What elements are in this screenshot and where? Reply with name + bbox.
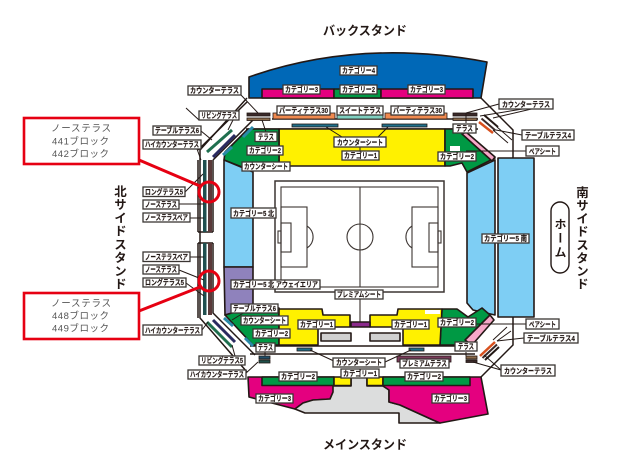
category 4 upper tier	[249, 53, 487, 98]
label: リビングテラス5: リビングテラス5	[201, 355, 243, 365]
label: カウンターテラス NE: カウンターテラス	[502, 99, 550, 109]
main stand seating	[248, 377, 488, 423]
label: カテゴリー1 lower left: カテゴリー1	[300, 319, 333, 329]
label: テラス NE: テラス	[456, 124, 473, 133]
label: カウンターシート main: カウンターシート	[336, 357, 382, 367]
label: ハイカウンターテラス main	[188, 369, 246, 379]
heading: south side stand: 南サイドスタンド	[574, 186, 588, 290]
main yellow right	[367, 377, 383, 386]
label: パーティテラス30 right: パーティテラス30	[393, 106, 442, 115]
label: ペアシート NE	[526, 146, 559, 156]
label: ノーステラス lower: ノーステラス	[145, 265, 177, 274]
label: カテゴリー5 南: カテゴリー5 南	[484, 233, 527, 243]
label: ハイカウンターテラス north	[143, 139, 201, 149]
bottom terrace bars	[259, 348, 477, 363]
home pill	[551, 202, 569, 273]
label: スイートテラス: スイートテラス	[339, 106, 381, 115]
label: テーブルテラス4 NE: テーブルテラス4	[525, 130, 572, 140]
label: カウンターシート NW: カウンターシート	[244, 161, 288, 171]
label: テーブルテラス4 SE: テーブルテラス4	[527, 333, 576, 343]
label: ペアシート SE: ペアシート	[529, 320, 556, 329]
label: カウンターシート back: カウンターシート	[337, 137, 383, 147]
callout: north terrace 448 449	[24, 293, 139, 339]
diagonal terraces	[207, 115, 512, 360]
label: カウンターシート NW	[242, 161, 290, 171]
lower pink strip	[465, 315, 494, 345]
label: ノーステラスペア lower: ノーステラスペア	[145, 252, 188, 262]
label: テーブルテラス6 lower: テーブルテラス6	[233, 303, 276, 313]
back category 3 left	[262, 89, 334, 98]
label: リビングテラス: リビングテラス	[201, 110, 237, 120]
label: カテゴリー1 lower right: カテゴリー1	[394, 319, 427, 329]
label: カテゴリー2 main left: カテゴリー2	[281, 371, 315, 381]
label: リビングテラス	[199, 110, 239, 120]
category 5 south outer blue	[498, 158, 534, 317]
label: ロングテラス5 upper: ロングテラス5	[145, 186, 183, 196]
heading: back stand: バックスタンド	[323, 24, 407, 38]
main gray block	[295, 377, 440, 423]
main green left	[262, 377, 334, 386]
label: カテゴリー2 NW: カテゴリー2	[249, 145, 281, 155]
label: テラス SE: テラス	[458, 342, 474, 351]
main magenta right	[383, 377, 488, 423]
heading: north side stand: 北サイドスタンド	[112, 185, 126, 290]
lower yellow left	[279, 309, 350, 345]
label: カテゴリー2 main right: カテゴリー2	[407, 371, 441, 381]
label: カウンターシート SW: カウンターシート	[243, 315, 286, 325]
leader lines	[179, 95, 553, 374]
north terrace strips	[203, 160, 212, 315]
label: プレミアムテラス: プレミアムテラス	[402, 359, 447, 368]
label: カテゴリー2 back: カテゴリー2	[342, 84, 375, 94]
red highlight circle lower	[199, 271, 219, 291]
red leader upper	[139, 160, 200, 186]
label: カテゴリー2 NE: カテゴリー2	[440, 151, 474, 161]
callout: north terrace 448 449: ノーステラス	[51, 298, 111, 310]
heading: main stand: メインスタンド	[323, 438, 407, 452]
label: ノーステラス upper: ノーステラス	[145, 200, 177, 209]
label: カウンターテラス SE	[501, 365, 555, 376]
label: カテゴリー3 main left: カテゴリー3	[258, 393, 291, 403]
label: ハイカウンターテラス north: ハイカウンターテラス	[145, 139, 199, 149]
label: ペアシート NE: ペアシート	[529, 147, 556, 156]
notch NE	[450, 146, 460, 151]
callout: north terrace 441 442: 442ブロック	[52, 148, 109, 160]
home pill: ホーム	[553, 218, 567, 258]
label: カテゴリー2 SW: カテゴリー2	[255, 328, 288, 338]
label: ハイカウンターテラス lower	[143, 325, 202, 335]
back category 2	[334, 89, 381, 98]
main yellow left	[334, 377, 351, 386]
label: ハイカウンターテラス main: ハイカウンターテラス	[190, 369, 244, 379]
category 5 south inner blue	[467, 160, 495, 315]
label: テラス SW: テラス	[258, 343, 273, 352]
label: パーティテラス30 left: パーティテラス30	[279, 106, 328, 115]
callout: north terrace 448 449: 449ブロック	[52, 322, 109, 334]
label: カテゴリー5 北 アウェイエリア: カテゴリー5 北 アウェイエリア	[233, 279, 318, 289]
red highlight circle upper	[199, 182, 219, 202]
back category 3 right	[381, 89, 473, 98]
label: カウンターテラス NW: カウンターテラス	[190, 85, 239, 95]
pink pair seat strip NE	[462, 132, 495, 161]
pitch	[275, 181, 444, 292]
category 1 back yellow	[279, 129, 445, 166]
label: カテゴリー2 SE: カテゴリー2	[440, 317, 474, 327]
label: カテゴリー4: カテゴリー4	[342, 65, 376, 75]
label: カテゴリー3 back left: カテゴリー3	[285, 84, 318, 94]
label: カテゴリー5 北: カテゴリー5 北	[233, 208, 274, 218]
label: ハイカウンターテラス lower: ハイカウンターテラス	[145, 325, 200, 335]
yellow notch	[425, 310, 440, 314]
label: カテゴリー1 back: カテゴリー1	[344, 150, 377, 160]
red leader lower	[139, 287, 200, 311]
label: カテゴリー1 main: カテゴリー1	[343, 368, 377, 378]
green category 2 NE	[445, 129, 495, 172]
lower green right	[440, 308, 490, 345]
label: カウンターテラス SE: カウンターテラス	[504, 366, 552, 376]
stadium outline and concourse lines	[198, 98, 513, 377]
back stand seating	[249, 53, 487, 98]
label: テーブルテラス6 north: テーブルテラス6	[155, 125, 199, 135]
label: プレミアムシート: プレミアムシート	[337, 290, 381, 299]
terrace bars top	[247, 113, 477, 127]
category 5 north blue	[224, 160, 253, 267]
callout: north terrace 441 442: 441ブロック	[52, 136, 109, 148]
label: テラス NW: テラス	[258, 132, 274, 142]
callout: north terrace 441 442: ノーステラス	[51, 124, 111, 134]
label: カテゴリー3 main right: カテゴリー3	[434, 393, 467, 403]
lower yellow right	[370, 309, 442, 345]
label: カテゴリー3 back right: カテゴリー3	[410, 84, 443, 94]
away area purple	[224, 267, 253, 315]
green category 2 NW	[224, 129, 279, 167]
label: カウンターシート SW	[241, 315, 288, 325]
main magenta left	[248, 377, 334, 409]
main green right	[383, 377, 470, 386]
callout: north terrace 448 449: 448ブロック	[52, 310, 109, 322]
callout: north terrace 441 442	[24, 118, 139, 164]
label: ペアシート SE	[526, 319, 559, 329]
lower green left	[225, 307, 279, 345]
gray premium boxes	[321, 333, 400, 341]
label: テラス SW	[256, 343, 275, 352]
label: ノーステラスペア upper: ノーステラスペア	[145, 213, 188, 222]
premium seat purple	[351, 322, 370, 327]
label: ロングテラス5 lower: ロングテラス5	[145, 277, 184, 287]
label: リビングテラス5	[199, 355, 245, 365]
